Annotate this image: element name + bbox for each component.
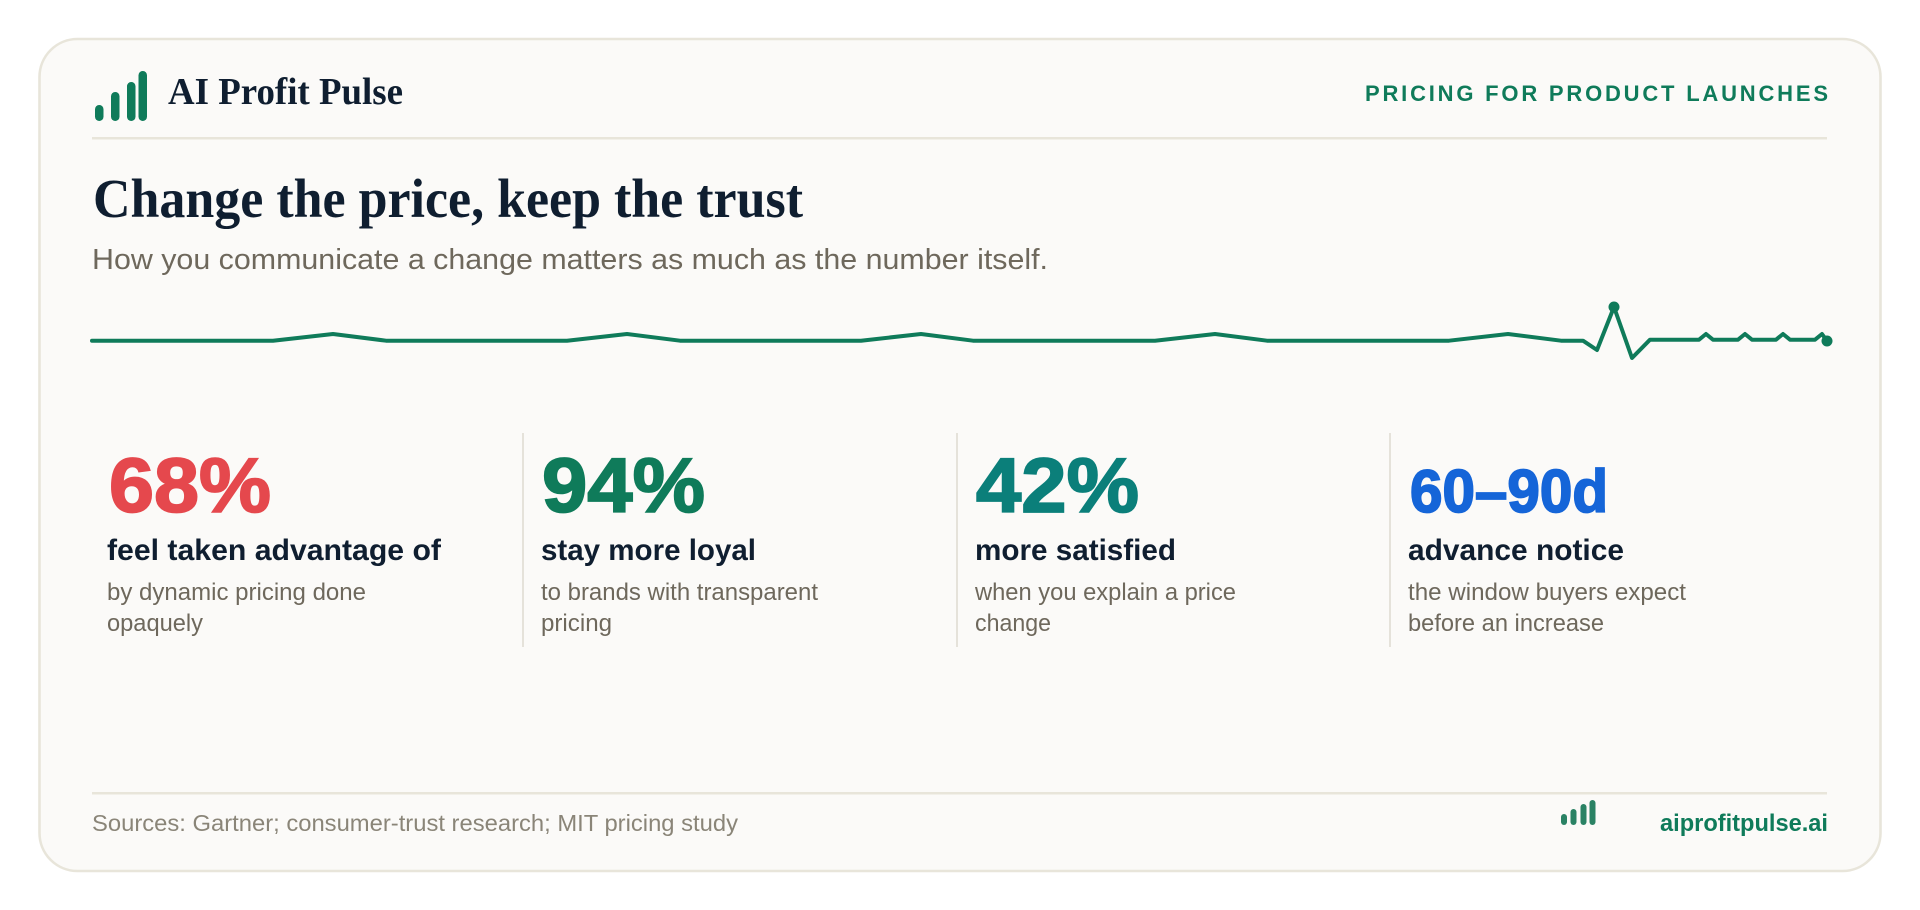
stat: 42%: more satisfied <box>975 534 1176 567</box>
subtitle: How you communicate a change matters as much as the number itself. <box>92 244 1048 276</box>
stat: 68%: feel taken advantage of <box>107 534 442 567</box>
website: aiprofitpulse.ai <box>1660 810 1828 837</box>
series label: PRICING FOR PRODUCT LAUNCHES <box>1365 81 1828 106</box>
icon: footer signal bars <box>1561 800 1596 825</box>
icon: brand signal bars <box>95 71 147 121</box>
stat: 94%: stay more loyal <box>541 534 756 567</box>
stat: 42%: 42% <box>976 443 1139 529</box>
title: Change the price, keep the trust <box>93 168 804 229</box>
stat: 94% <box>541 443 818 637</box>
stat: 94%: pricing <box>541 610 612 637</box>
peak marker <box>1608 302 1620 312</box>
stat: 60–90d <box>1408 458 1686 637</box>
pulse line chart <box>92 302 1832 358</box>
stat: 60–90d: before an increase <box>1408 610 1604 637</box>
header <box>95 71 1828 121</box>
stat: 60–90d: 60–90d <box>1410 458 1608 525</box>
stat: 42%: when you explain a price <box>974 579 1236 606</box>
footer <box>92 800 1828 837</box>
stat: 60–90d: advance notice <box>1408 534 1624 567</box>
brand name: AI Profit Pulse <box>168 71 403 113</box>
sources: Sources: Gartner; consumer-trust research; MIT pricing study <box>92 810 738 836</box>
stat: 42%: change <box>975 610 1051 637</box>
stat: 94%: 94% <box>542 443 705 529</box>
stat: 60–90d: the window buyers expect <box>1408 579 1686 606</box>
stat: 42% <box>974 443 1236 637</box>
stat: 68% <box>107 443 442 637</box>
stat: 68%: 68% <box>109 443 271 529</box>
stat: 68%: by dynamic pricing done <box>107 579 366 606</box>
stat: 68%: opaquely <box>107 610 203 637</box>
end marker <box>1822 336 1832 346</box>
stat: 94%: to brands with transparent <box>541 579 818 606</box>
